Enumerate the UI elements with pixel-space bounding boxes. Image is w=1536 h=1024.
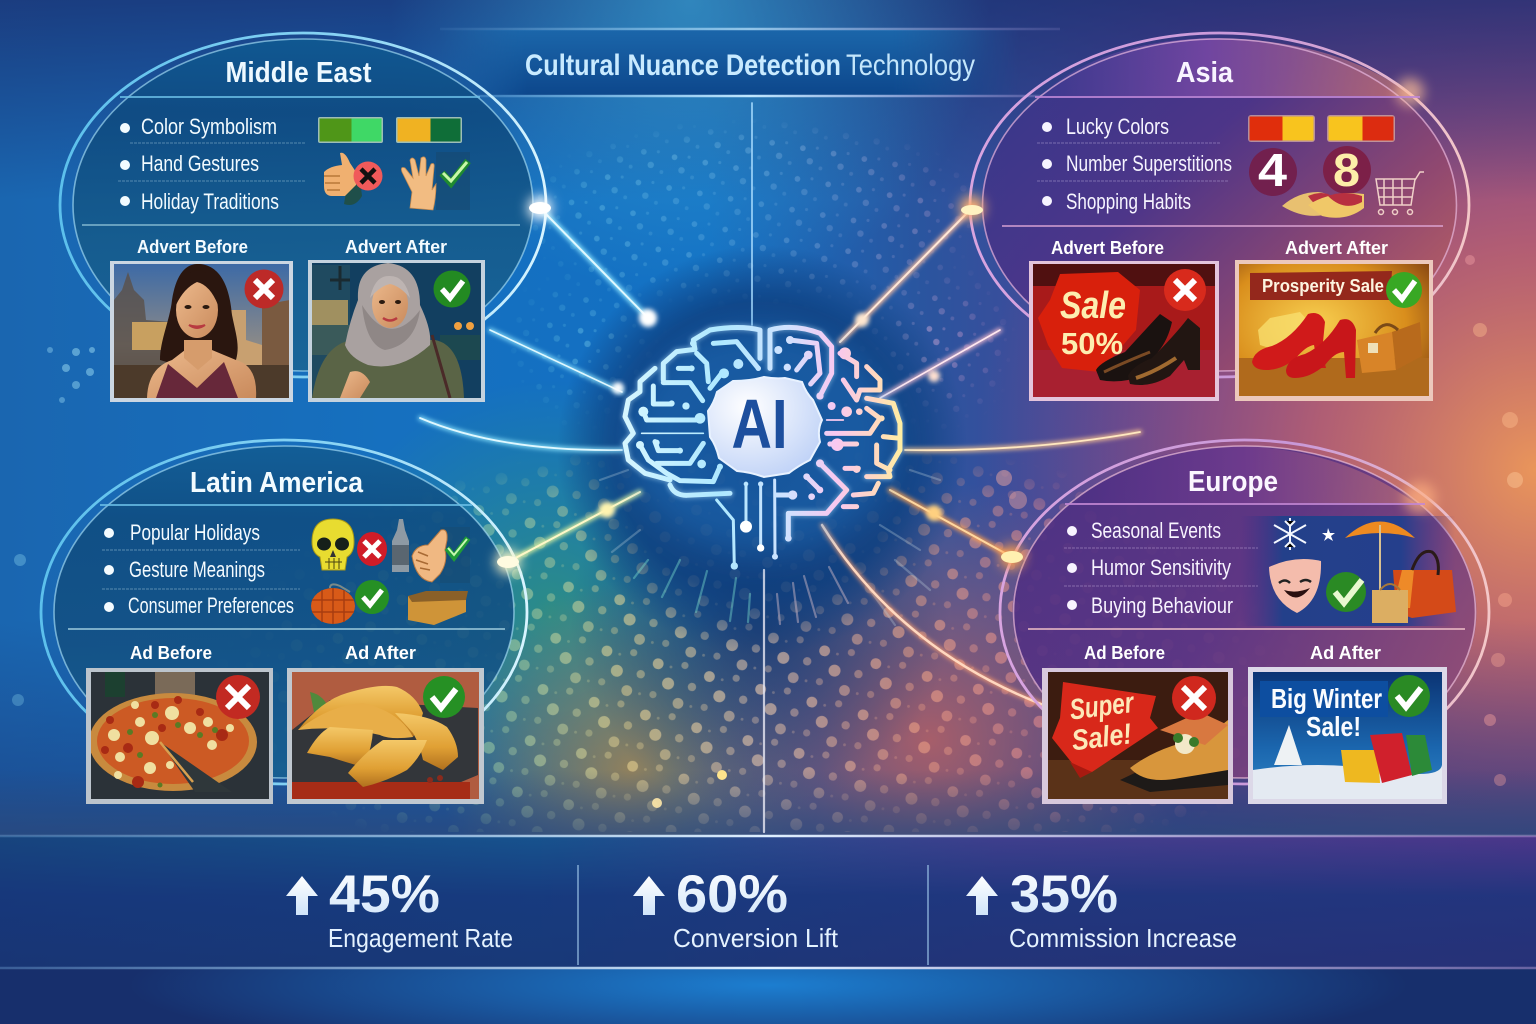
text: super sale: Sale!	[1070, 718, 1134, 757]
icon: box	[408, 591, 468, 625]
stat: 60% conversion lift	[633, 865, 839, 953]
label: Ad After: Ad After	[1310, 643, 1381, 663]
list: Middle East nuances: Hand Gestures	[141, 151, 259, 176]
text: big winter sale: Sale!	[1306, 711, 1361, 742]
icon: colour swatches	[318, 117, 462, 143]
badge: approved	[1388, 675, 1430, 717]
image: advert after, woman in hijab	[308, 260, 485, 402]
text: sale 50 percent	[1060, 285, 1126, 361]
heading: Middle East: Middle East	[226, 57, 372, 89]
icon: umbrella	[1345, 522, 1415, 590]
icon: number 8	[1323, 144, 1371, 196]
badge: approved	[434, 270, 470, 308]
label: Advert Before: Advert Before	[137, 237, 248, 257]
icon: comedy mask	[1269, 559, 1321, 613]
icon: skull	[312, 519, 354, 570]
list: Latin America nuances: Consumer Preferences	[128, 593, 294, 618]
list: Asia nuances: Number Superstitions	[1066, 151, 1232, 176]
connector lines from brain to regions	[420, 103, 1140, 832]
heading: Asia: Asia	[1176, 57, 1234, 89]
stat: 60% conversion lift: Conversion Lift	[673, 923, 839, 953]
label: Ad Before: Ad Before	[1084, 643, 1165, 663]
stat: 45% engagement rate: Engagement Rate	[328, 923, 513, 953]
list: Asia nuances: Lucky Colors	[1066, 114, 1169, 139]
icon: slippers	[1282, 192, 1364, 218]
list: Latin America nuances: Gesture Meanings	[129, 557, 265, 582]
AI hexagon badge	[708, 377, 822, 477]
label: Advert After: Advert After	[1285, 238, 1388, 258]
icon: thumbs up rejected	[324, 153, 382, 205]
icon: shopping cart	[1376, 172, 1424, 214]
banner: prosperity sale	[1250, 271, 1392, 300]
image: ad before, pizza	[86, 668, 273, 804]
badge: approved	[355, 580, 389, 614]
label: Ad After: Ad After	[345, 643, 416, 663]
image: advert before, sale shoes	[1029, 261, 1219, 401]
icon: bottle	[392, 519, 409, 572]
icon: thumbs up	[412, 527, 470, 583]
panel: Middle East	[60, 33, 552, 402]
label: Advert After: Advert After	[345, 237, 447, 257]
list: Europe nuances: Seasonal Events	[1091, 518, 1221, 543]
list: Middle East nuances: Holiday Traditions	[141, 189, 279, 214]
badge: approved	[1386, 272, 1422, 308]
badge: approved	[423, 676, 465, 718]
badge: rejected	[357, 532, 387, 566]
icon: open hand approved	[401, 152, 470, 210]
panel: Europe	[1000, 440, 1489, 804]
list: Middle East nuances: Color Symbolism	[141, 114, 277, 139]
list: Europe nuances	[1064, 518, 1258, 618]
text: sale 50 percent: 50%	[1061, 326, 1123, 361]
central AI brain	[625, 325, 900, 570]
panel: Asia	[960, 33, 1469, 401]
text: sale 50 percent: Sale	[1060, 285, 1126, 327]
AI hexagon badge: AI	[732, 385, 788, 463]
list: Europe nuances: Humor Sensitivity	[1091, 555, 1231, 580]
list: Latin America nuances: Popular Holidays	[130, 520, 260, 545]
list: Middle East nuances	[118, 114, 305, 214]
title band	[469, 30, 994, 95]
banner: prosperity sale: Prosperity Sale	[1262, 275, 1384, 296]
heading: Europe: Europe	[1188, 466, 1278, 498]
icon: number 4	[1249, 144, 1297, 196]
badge: rejected	[1164, 269, 1206, 311]
image: advert after, prosperity sale	[1235, 260, 1433, 401]
list: Europe nuances: Buying Behaviour	[1091, 593, 1233, 618]
label: Advert Before: Advert Before	[1051, 238, 1164, 258]
badge: approved	[1326, 572, 1366, 612]
heading: Latin America: Latin America	[190, 467, 364, 499]
text: super sale	[1068, 687, 1137, 757]
stat: 35% commission increase: 35%	[1010, 865, 1118, 924]
icon: shopping bags	[1372, 551, 1456, 623]
image: ad before, super sale	[1042, 668, 1233, 804]
brain circuit	[625, 327, 900, 570]
stat: 35% commission increase: Commission Increase	[1009, 923, 1237, 953]
icon: number 4: 4	[1258, 144, 1287, 196]
title	[440, 29, 1060, 96]
icon: number 8: 8	[1333, 144, 1360, 196]
image: ad after, empanadas	[287, 668, 484, 804]
title: Technology	[846, 49, 975, 82]
icon: lucky colour swatches	[1248, 115, 1395, 142]
list: Asia nuances: Shopping Habits	[1066, 189, 1191, 214]
icon: snowflake	[1274, 518, 1306, 550]
title: Cultural Nuance Detection	[525, 49, 841, 82]
stat: 35% commission increase	[966, 865, 1237, 953]
icon panel: seasonal and humor	[1240, 516, 1456, 626]
text: super sale: Super	[1068, 687, 1137, 727]
panel: Latin America	[41, 440, 527, 804]
badge: rejected	[1172, 676, 1216, 720]
image: advert before, woman	[110, 261, 293, 402]
text: big winter sale	[1271, 683, 1382, 742]
stat: 45% engagement rate: 45%	[329, 865, 440, 924]
KPI band	[0, 836, 1536, 1024]
stat: 60% conversion lift: 60%	[676, 865, 788, 924]
list: Asia nuances	[1037, 114, 1232, 214]
stat: 45% engagement rate	[286, 865, 513, 953]
badge: rejected	[216, 675, 260, 719]
icon: pumpkin	[311, 584, 355, 624]
image: ad after, big winter sale	[1248, 667, 1447, 804]
badge: rejected	[244, 270, 284, 308]
list: Latin America nuances	[102, 520, 300, 618]
text: big winter sale: Big Winter	[1271, 683, 1382, 714]
label: Ad Before: Ad Before	[130, 643, 212, 663]
